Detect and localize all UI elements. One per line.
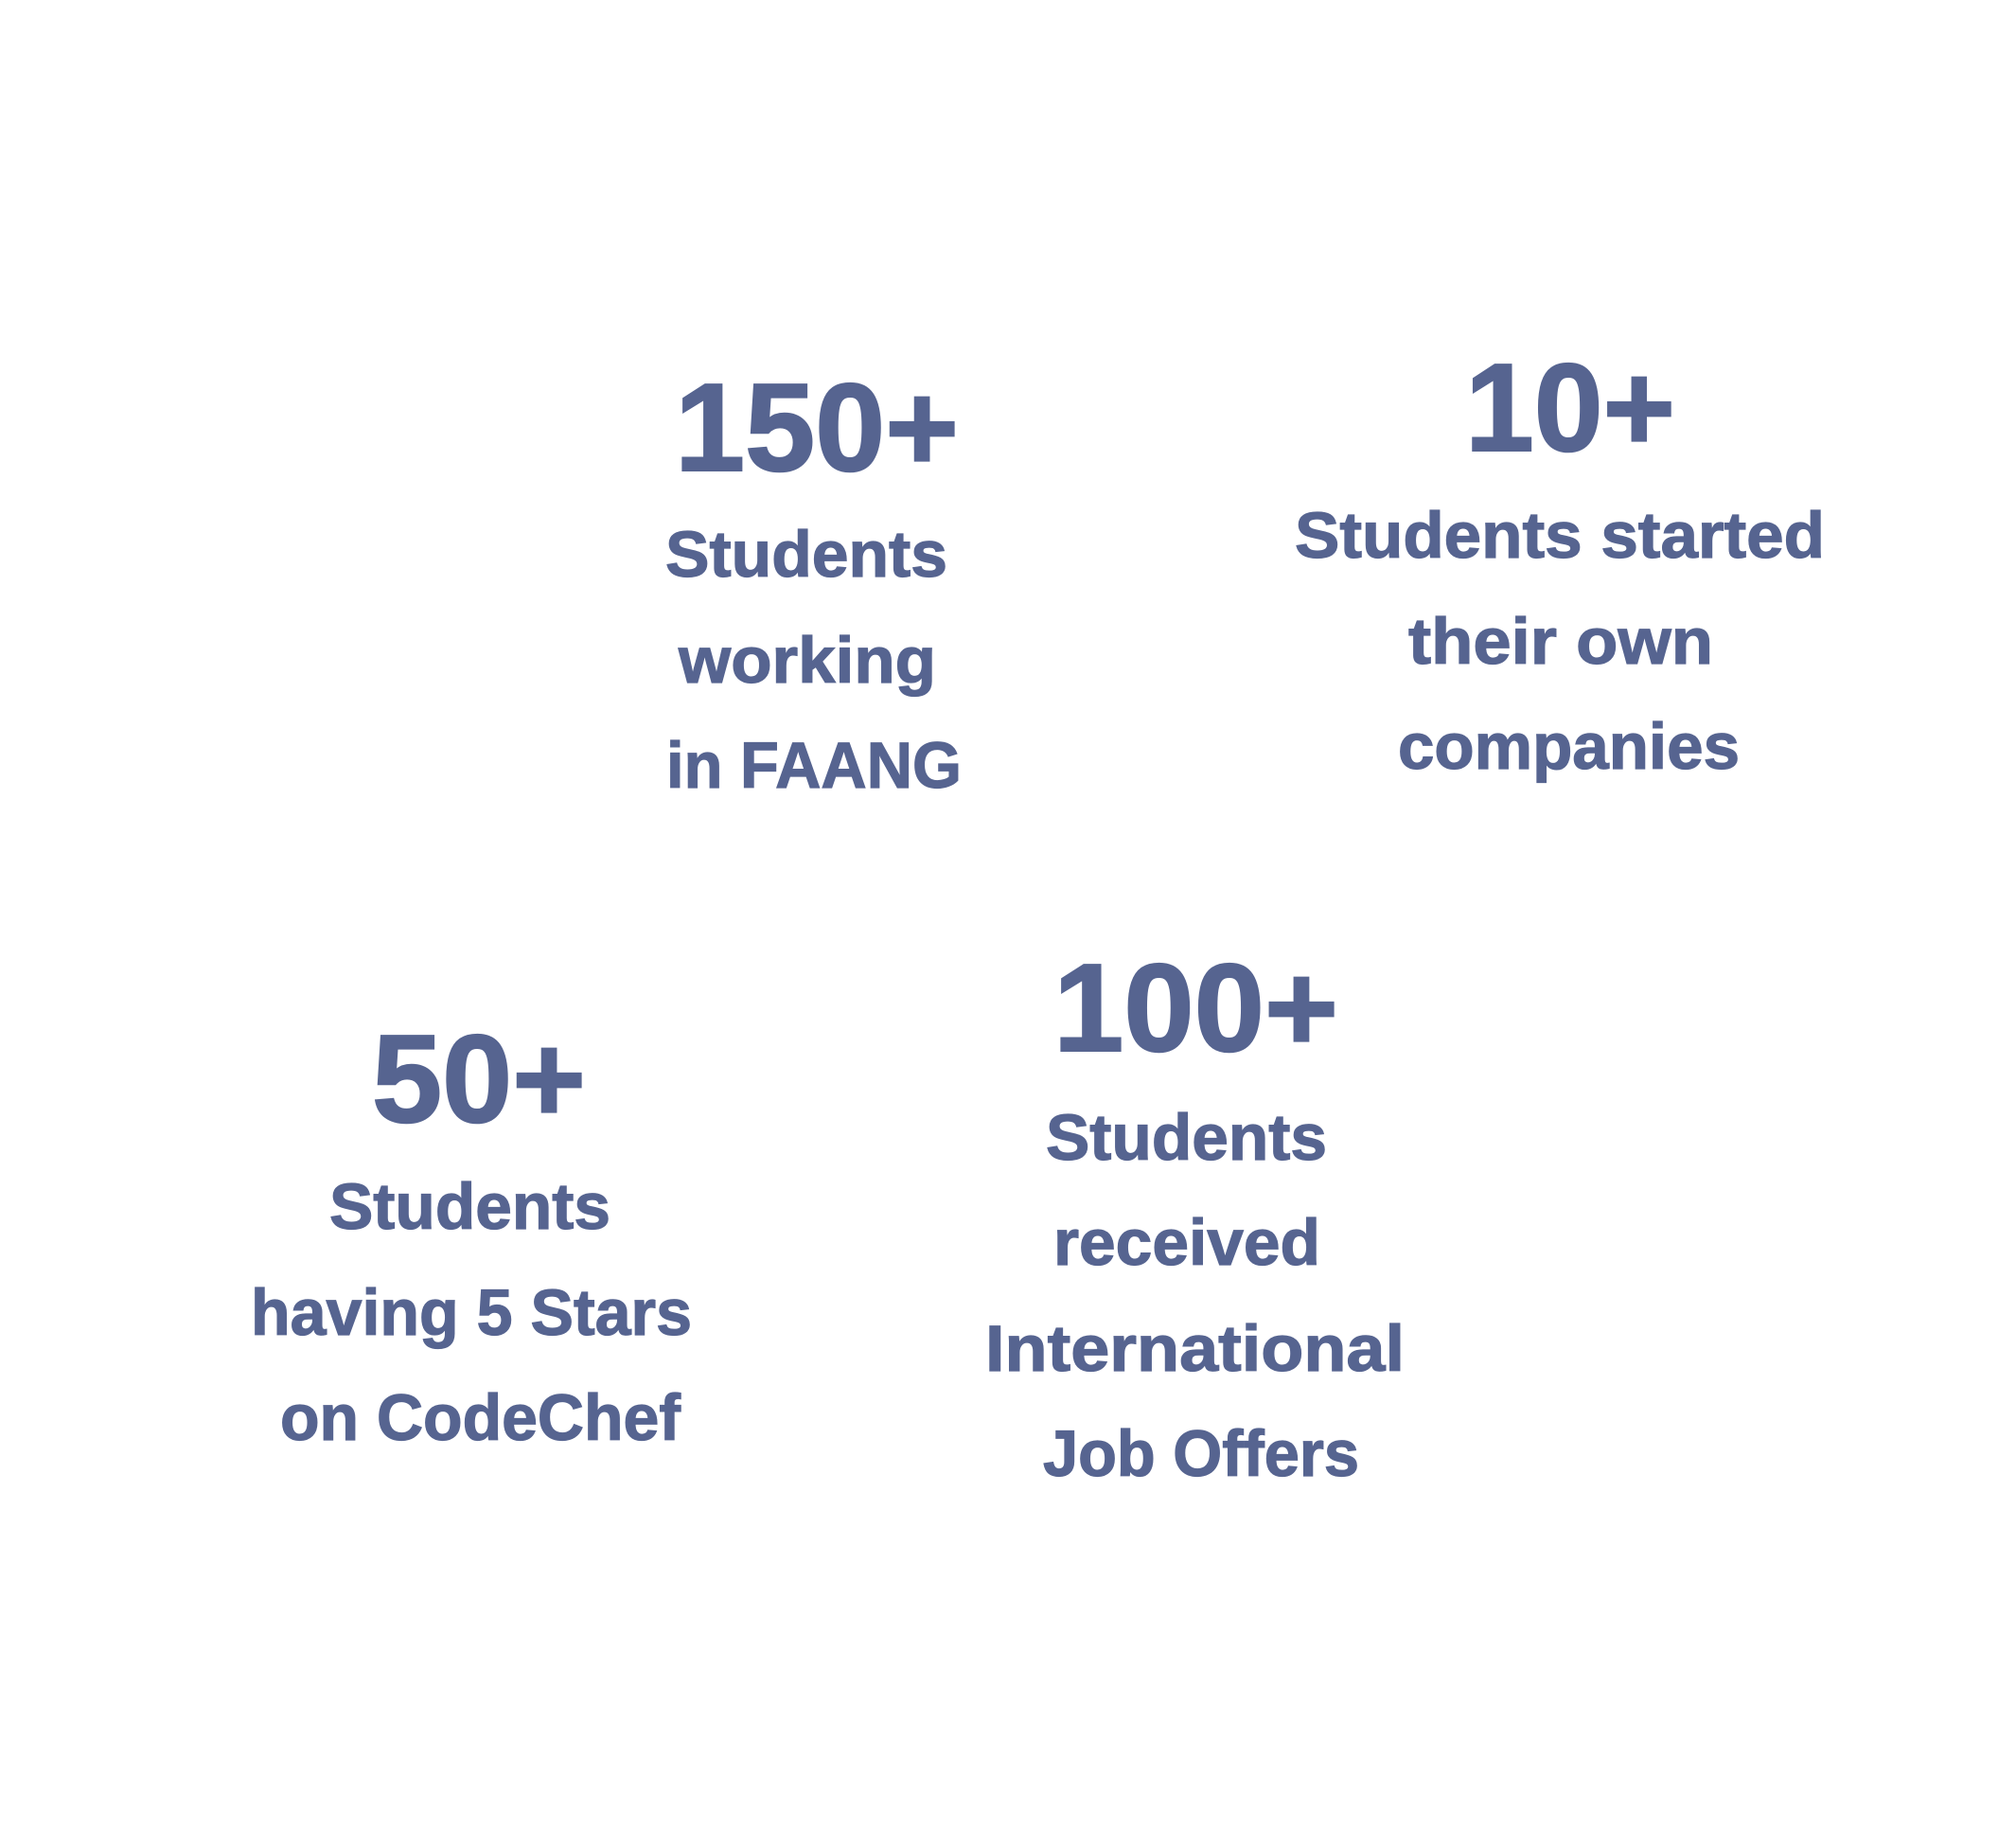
label: students working in FAANG: Students — [665, 518, 947, 591]
label: students having 5 stars on CodeChef: having 5 Stars — [251, 1276, 692, 1349]
number: 150+: 150+ — [675, 358, 959, 497]
number: 10+: 10+ — [1465, 338, 1675, 477]
label: students working in FAANG — [665, 518, 962, 802]
panel: 150+ students in FAANG — [665, 358, 962, 802]
label: students received international job offers: Job Offers — [1043, 1417, 1359, 1490]
label: students started their own companies: Students started — [1295, 499, 1825, 572]
label: students received international job offers — [985, 1101, 1405, 1490]
label: students started their own companies: companies — [1398, 710, 1740, 783]
label: students having 5 stars on CodeChef — [251, 1170, 692, 1454]
number: 100+: 100+ — [1053, 938, 1338, 1077]
panel: 100+ international offers — [985, 938, 1405, 1490]
panel: 10+ students started companies — [1295, 338, 1825, 783]
label: students working in FAANG: working — [678, 624, 936, 697]
label: students started their own companies — [1295, 499, 1825, 783]
number: 50+: 50+ — [372, 1009, 586, 1148]
panel: 50+ students with 5 stars — [251, 1009, 692, 1454]
label: students working in FAANG: in FAANG — [666, 729, 962, 802]
label: students received international job offers: Students — [1046, 1101, 1327, 1174]
label: students having 5 stars on CodeChef: on CodeChef — [280, 1381, 681, 1454]
label: students having 5 stars on CodeChef: Students — [329, 1170, 610, 1243]
label: students received international job offers: International — [985, 1312, 1405, 1385]
label: students started their own companies: their own — [1408, 605, 1713, 678]
label: students received international job offers: received — [1053, 1206, 1320, 1279]
